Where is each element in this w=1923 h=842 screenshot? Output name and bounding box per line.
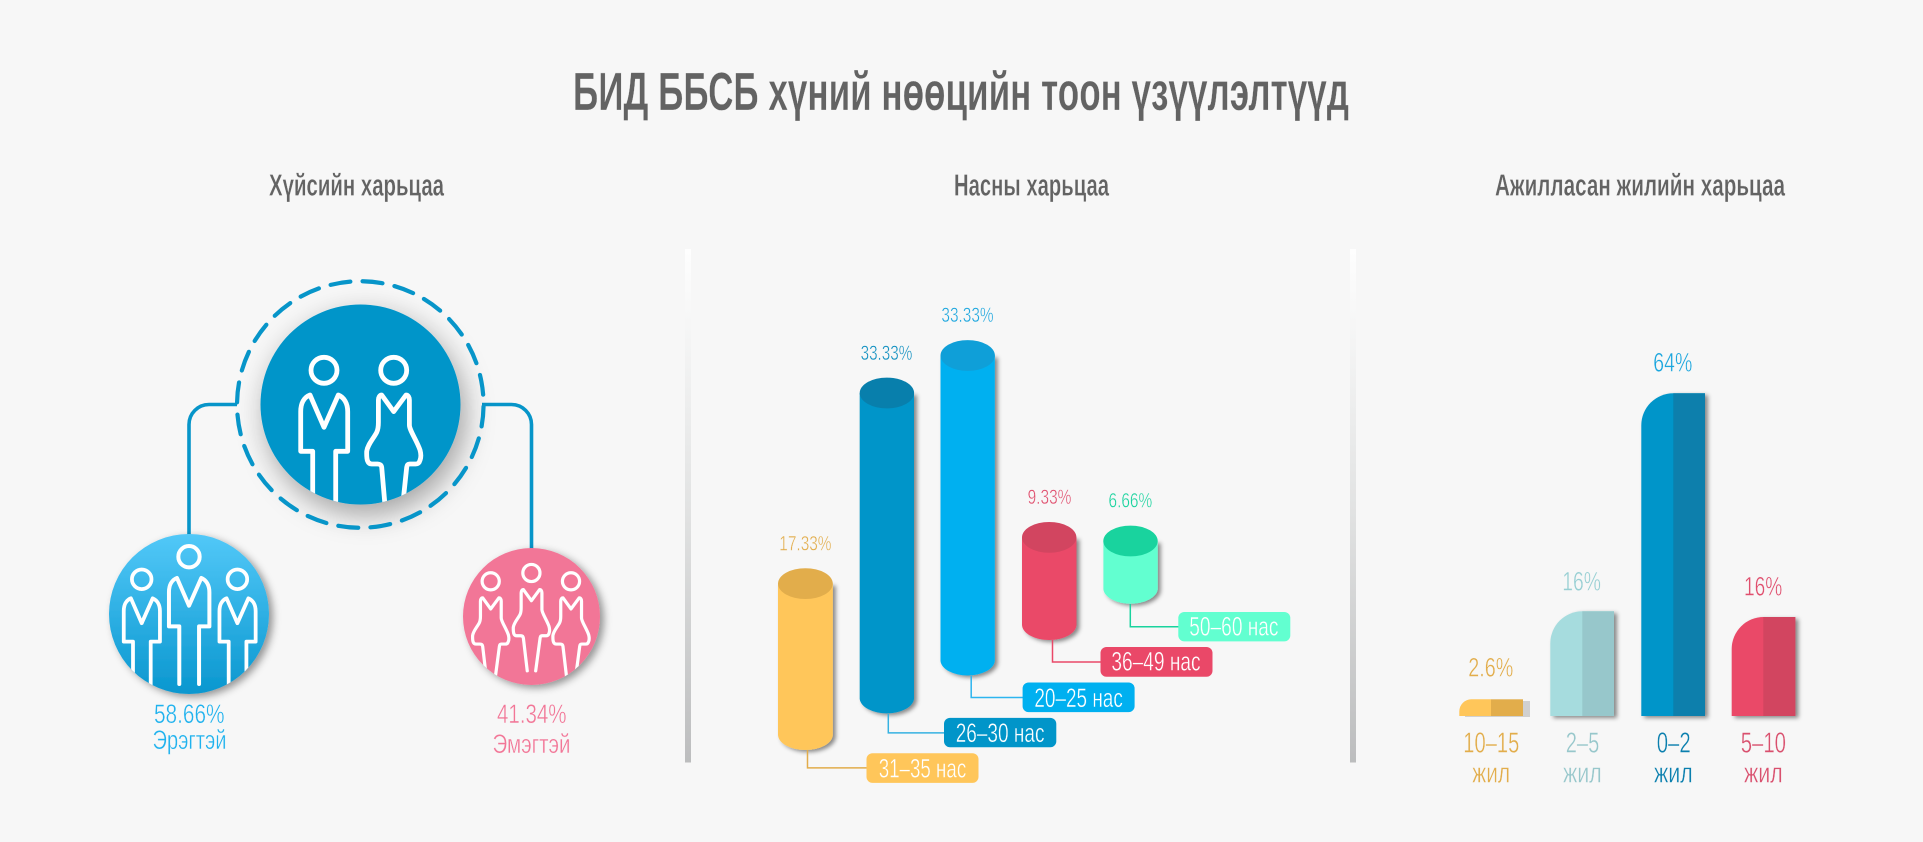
label: female [492, 699, 570, 759]
value 16% red: 16% [1744, 572, 1782, 602]
label: female: Эмэгтэй [492, 729, 570, 759]
title: БИД ББСБ хүний нөөцийн тоон үзүүлэлтүүд [573, 63, 1349, 122]
cylinder: 36-49 [1022, 522, 1076, 640]
icon: woman left [473, 573, 509, 692]
tag: 20-25 нас: 20–25 нас [1034, 683, 1123, 713]
cylinder: 20-25 [940, 340, 995, 675]
value 6.66%: 6.66% [1108, 488, 1152, 512]
connector 50-60 [1130, 604, 1179, 627]
tag: 36-49 нас: 36–49 нас [1111, 647, 1201, 677]
connector 36-49 [1052, 640, 1101, 662]
label: male: 58.66% [154, 699, 224, 729]
axis label 10-15 жил: 10–15 [1463, 728, 1519, 760]
cylinder: 26-30 [860, 378, 914, 713]
axis label 2-5 жил [1563, 728, 1602, 790]
divider right [1350, 249, 1356, 762]
axis label 10-15 жил: жил [1472, 758, 1510, 790]
icon: man center [169, 546, 209, 684]
connector 31-35 [808, 750, 867, 768]
heading: gender ratio: Хүйсийн харьцаа [269, 168, 444, 202]
value 9.33%: 9.33% [1028, 485, 1071, 509]
value 17.33%: 17.33% [779, 532, 832, 556]
heading: years worked ratio: Ажилласан жилийн харьцаа [1495, 168, 1785, 202]
value 33.33% light: 33.33% [941, 303, 994, 327]
connector right [482, 404, 532, 550]
axis label 5-10 жил: 5–10 [1741, 728, 1786, 760]
icon: woman [367, 357, 421, 505]
value 64%: 64% [1653, 348, 1692, 378]
axis label 5-10 жил: жил [1744, 758, 1783, 790]
cylinder: 31-35 [778, 568, 833, 750]
icon: man left [124, 570, 160, 702]
tag: 31-35 нас: 31–35 нас [879, 754, 966, 784]
icon: man [301, 357, 348, 505]
value 16% teal: 16% [1562, 567, 1601, 597]
axis label 2-5 жил: жил [1563, 758, 1602, 790]
value 33.33% dark: 33.33% [861, 341, 912, 365]
bar: 2-5 years [1550, 611, 1614, 716]
female circle with women icon [463, 548, 600, 692]
axis label 0-2 жил: жил [1654, 758, 1693, 790]
connector 20-25 [971, 676, 1023, 698]
bar: 10-15 years [1459, 699, 1530, 717]
tag: 26-30 нас: 26–30 нас [956, 718, 1044, 748]
panel: gender ratio [109, 281, 600, 759]
dashed ring [237, 281, 484, 528]
label: male [152, 699, 226, 755]
axis label 0-2 жил [1654, 728, 1693, 790]
bar: 5-10 years [1732, 617, 1795, 716]
bar: 0-2 years [1641, 393, 1705, 716]
heading: age ratio: Насны харьцаа [954, 168, 1109, 202]
axis label 5-10 жил [1741, 728, 1786, 790]
main circle with couple icon [260, 304, 460, 505]
axis label 10-15 жил [1463, 728, 1519, 790]
cylinder: 50-60 [1103, 526, 1158, 604]
label: female: 41.34% [497, 699, 566, 729]
axis label 0-2 жил: 0–2 [1657, 728, 1691, 760]
icon: woman center [513, 564, 550, 671]
icon: man right [219, 570, 256, 702]
connector 26-30 [888, 714, 944, 733]
panel: years worked ratio [1459, 348, 1795, 790]
tag: 50-60 нас: 50–60 нас [1189, 612, 1278, 642]
value 2.6%: 2.6% [1468, 653, 1513, 683]
panel: age ratio [778, 303, 1290, 784]
axis label 2-5 жил: 2–5 [1566, 728, 1599, 760]
label: male: Эрэгтэй [152, 725, 226, 755]
icon: woman right [553, 573, 589, 692]
male circle with men icon [109, 534, 269, 702]
divider left [685, 249, 691, 762]
connector left [189, 404, 237, 536]
